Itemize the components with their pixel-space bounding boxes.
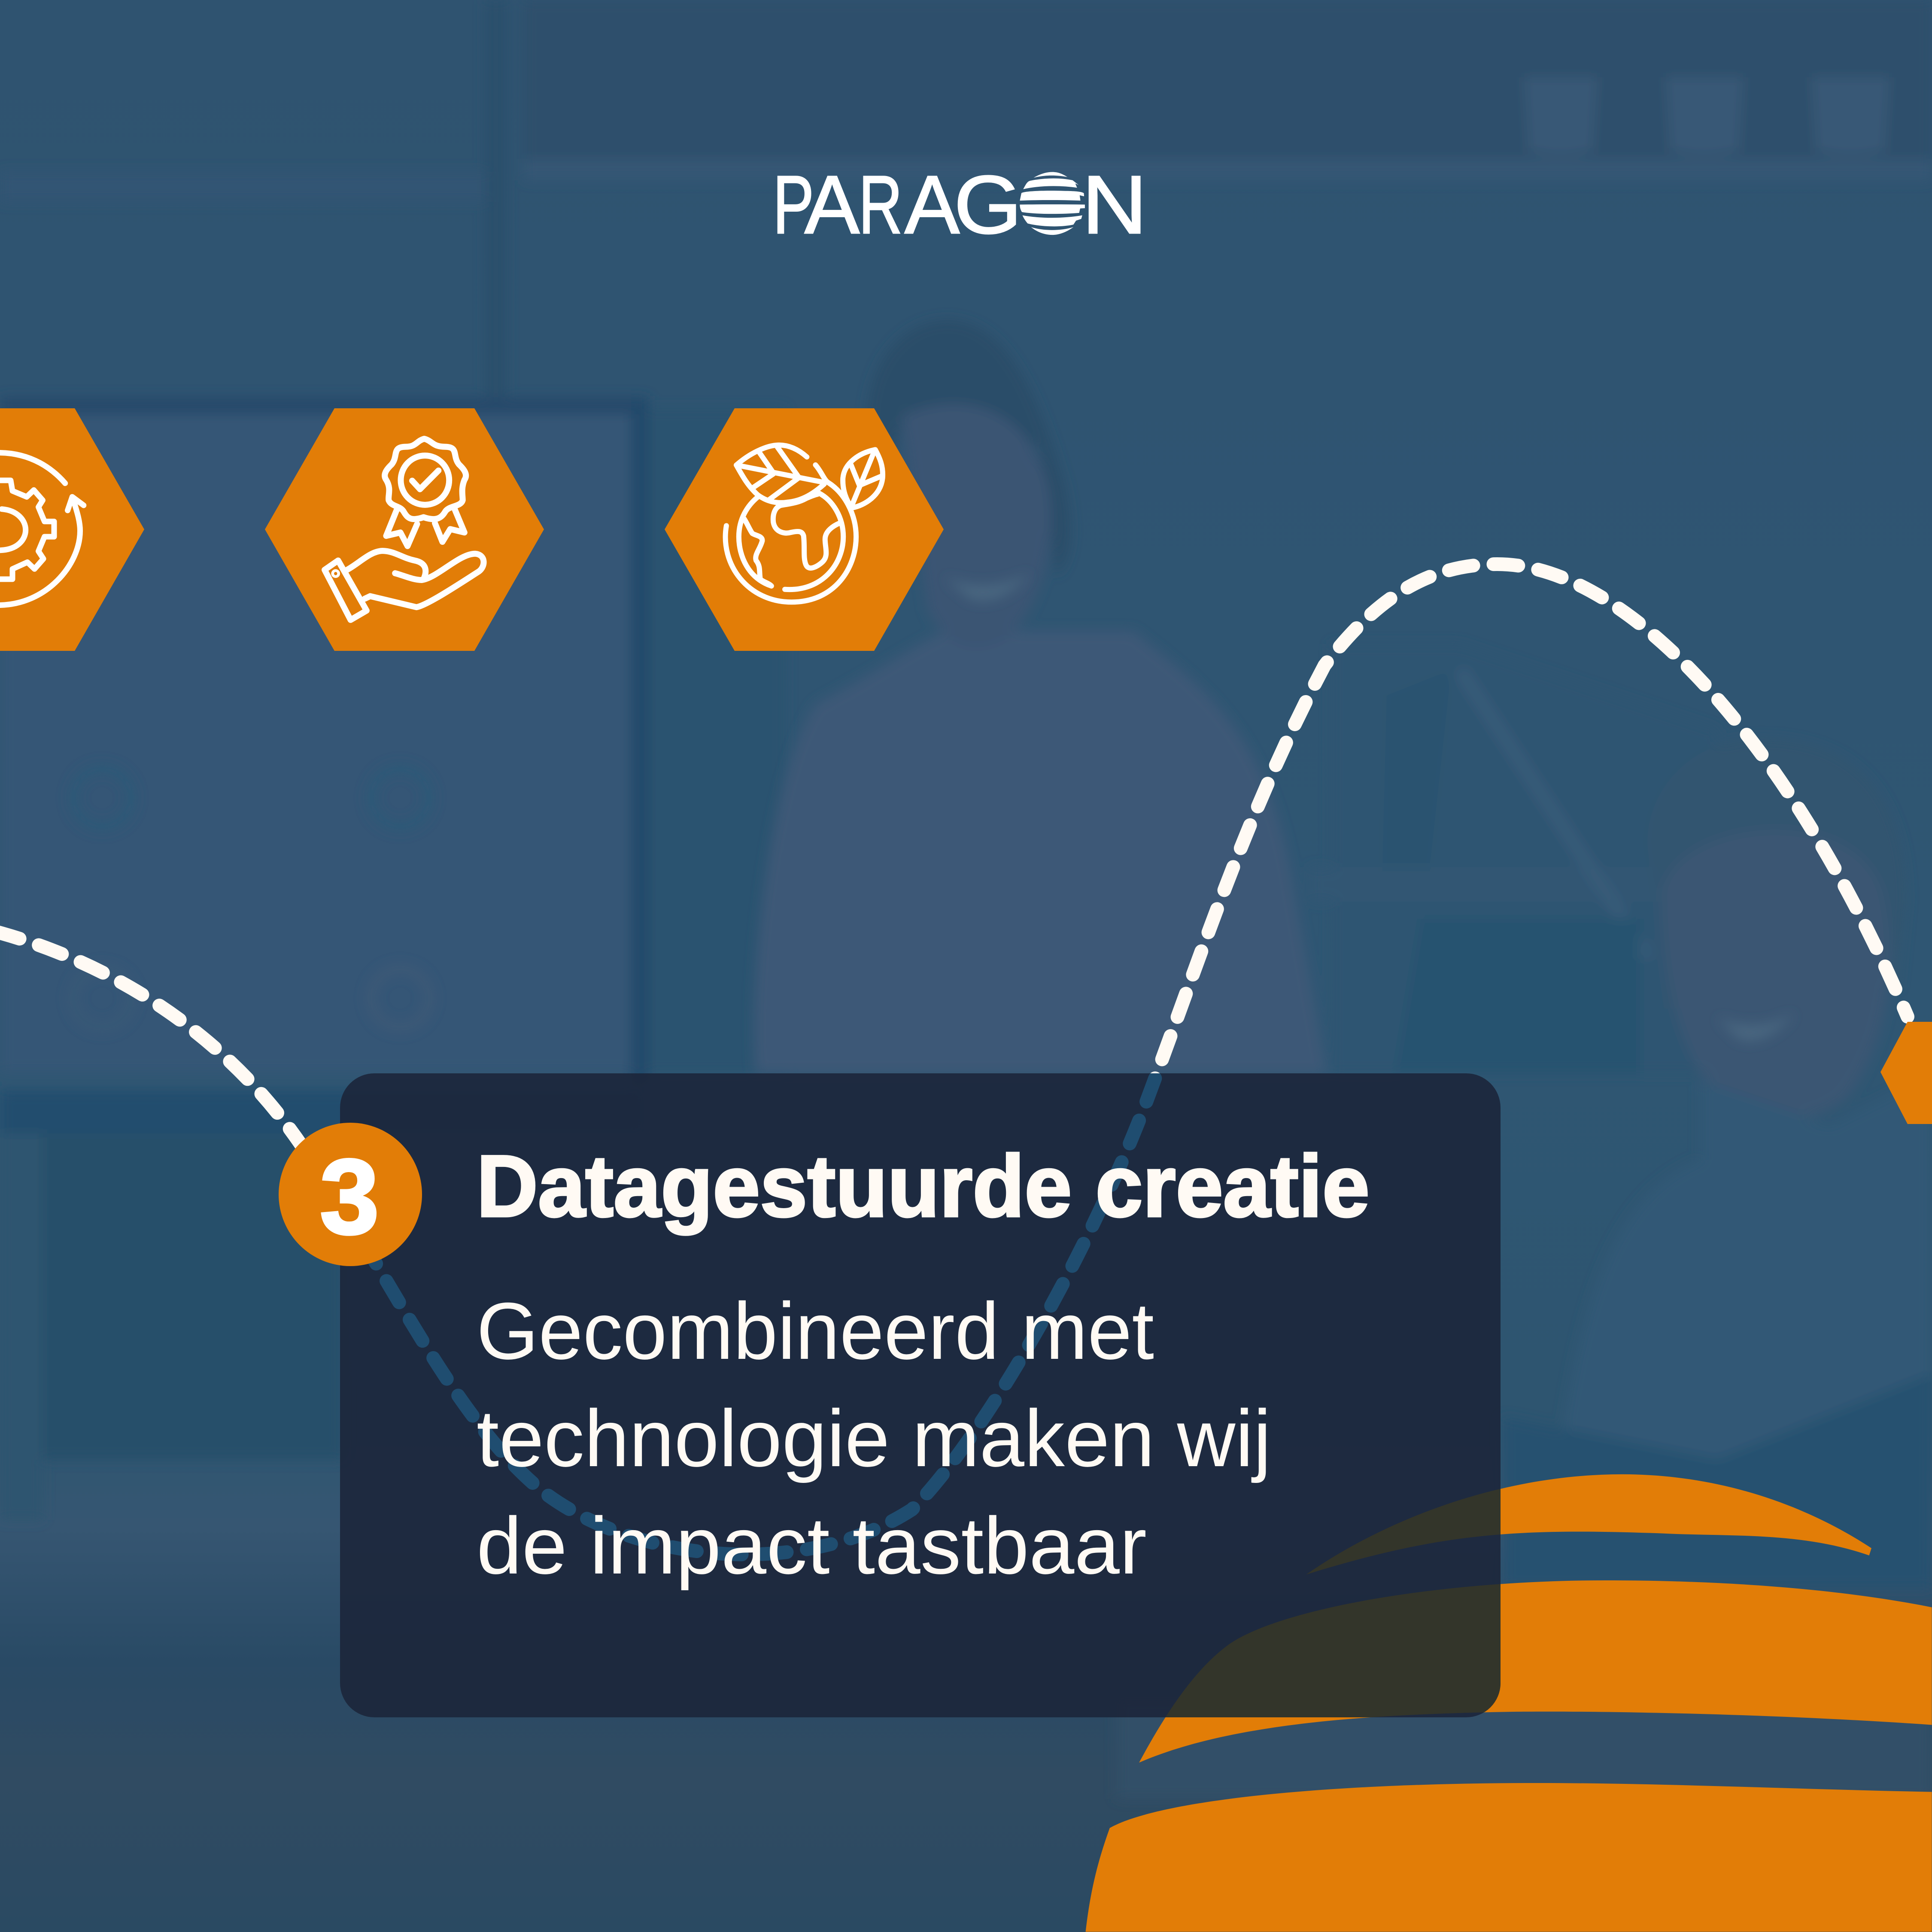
hexagon 4: partially visible at right edge bbox=[1880, 1022, 1932, 1124]
body text: de impact tastbaar bbox=[477, 1501, 1147, 1591]
heading: Datagestuurde creatie bbox=[477, 1137, 1370, 1235]
logo wordmark letters: A bbox=[805, 158, 860, 251]
hexagon 3: globe with leaves icon bbox=[665, 408, 944, 651]
dashed journey line, blue inside the panel bbox=[0, 564, 1908, 1555]
hexagon 1: gear cycle icon bbox=[0, 408, 144, 651]
logo wordmark letters: R bbox=[859, 158, 902, 251]
number badge 3: 3 bbox=[320, 1137, 379, 1256]
icon: earth with leaves bbox=[726, 445, 883, 602]
icon: gear with circular arrow bbox=[0, 453, 84, 605]
body text bbox=[477, 1286, 1271, 1591]
logo wordmark letters: A bbox=[905, 158, 960, 251]
logo wordmark letters: P bbox=[773, 158, 814, 251]
dashed journey line, white outside the panel bbox=[0, 557, 1914, 1148]
logo: PARAGON bbox=[773, 158, 1147, 251]
logo wordmark letters: N bbox=[1082, 158, 1147, 251]
number badge 3 bbox=[279, 1123, 422, 1266]
swoosh shapes seen through the panel (olive tint) bbox=[1165, 1489, 1501, 1717]
body text: technologie maken wij bbox=[477, 1393, 1271, 1483]
logo striped globe replacing the O bbox=[1020, 172, 1085, 235]
hexagon 2: award in hand icon bbox=[265, 408, 544, 651]
icon: rosette award above open hand bbox=[325, 439, 484, 620]
logo wordmark letters bbox=[773, 158, 1147, 251]
orange swoosh shapes (globe stripes) bbox=[1086, 1474, 1932, 1932]
panel: text card bbox=[340, 1073, 1501, 1717]
body text: Gecombineerd met bbox=[477, 1286, 1154, 1376]
logo wordmark letters: G bbox=[954, 158, 1022, 251]
